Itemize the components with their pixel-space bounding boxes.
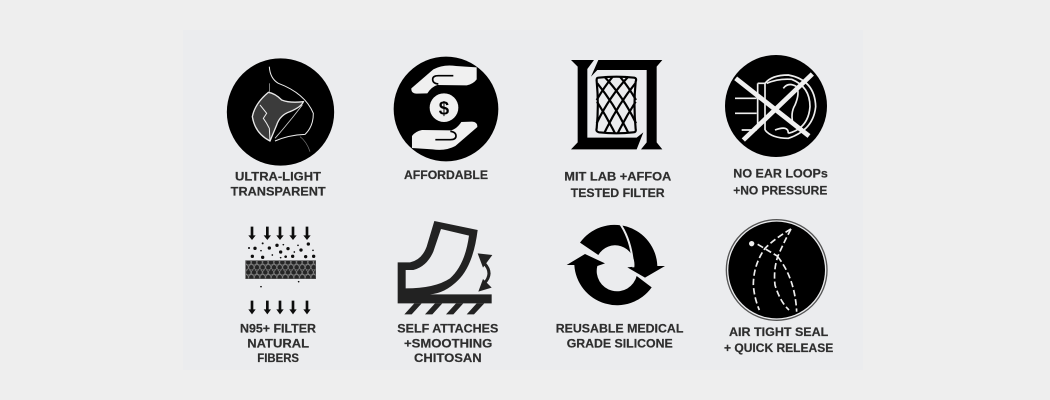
feature: affordable <box>394 57 498 182</box>
panel: background <box>183 30 863 370</box>
label: + QUICK RELEASE <box>724 341 833 355</box>
label: TESTED FILTER <box>571 186 665 200</box>
label: +NO PRESSURE <box>733 183 827 197</box>
label <box>556 322 684 350</box>
label <box>733 167 828 197</box>
label: REUSABLE MEDICAL <box>556 322 684 336</box>
feature: no ear loops <box>725 55 828 197</box>
label: SELF ATTACHES <box>397 322 498 336</box>
label <box>724 325 833 355</box>
label: AFFORDABLE <box>404 168 488 182</box>
feature: MIT lab filter <box>564 60 671 200</box>
feature: N95 filter <box>240 227 316 365</box>
feature: self attaches <box>397 221 498 365</box>
label <box>397 322 498 365</box>
icon: dashed seal lines <box>726 220 827 320</box>
label <box>231 170 326 198</box>
icon: hands and coin: $ <box>439 97 450 118</box>
icon: bending patch on surface <box>398 221 492 314</box>
label: MIT LAB +AFFOA <box>564 170 671 184</box>
feature: ultra-light transparent <box>227 58 334 199</box>
label: GRADE SILICONE <box>567 336 673 350</box>
label: NATURAL <box>247 336 309 350</box>
label: ULTRA-LIGHT <box>235 170 321 184</box>
label: NO EAR LOOPs <box>733 167 828 181</box>
label: CHITOSAN <box>414 351 482 365</box>
icon: circular arrows <box>567 223 665 305</box>
icon: mask on face <box>227 58 334 166</box>
label: FIBERS <box>257 351 299 365</box>
label: TRANSPARENT <box>231 184 326 198</box>
label: N95+ FILTER <box>240 322 316 336</box>
icon: crossed out ear <box>725 55 827 157</box>
feature: reusable silicone <box>556 223 684 350</box>
icon: filter with arrows <box>246 227 316 314</box>
label: +SMOOTHING <box>404 336 492 350</box>
label: AIR TIGHT SEAL <box>729 325 829 339</box>
label <box>240 322 316 365</box>
feature: air tight seal <box>724 220 833 355</box>
label <box>564 170 671 200</box>
icon: bracket and woven pillow <box>571 60 662 149</box>
